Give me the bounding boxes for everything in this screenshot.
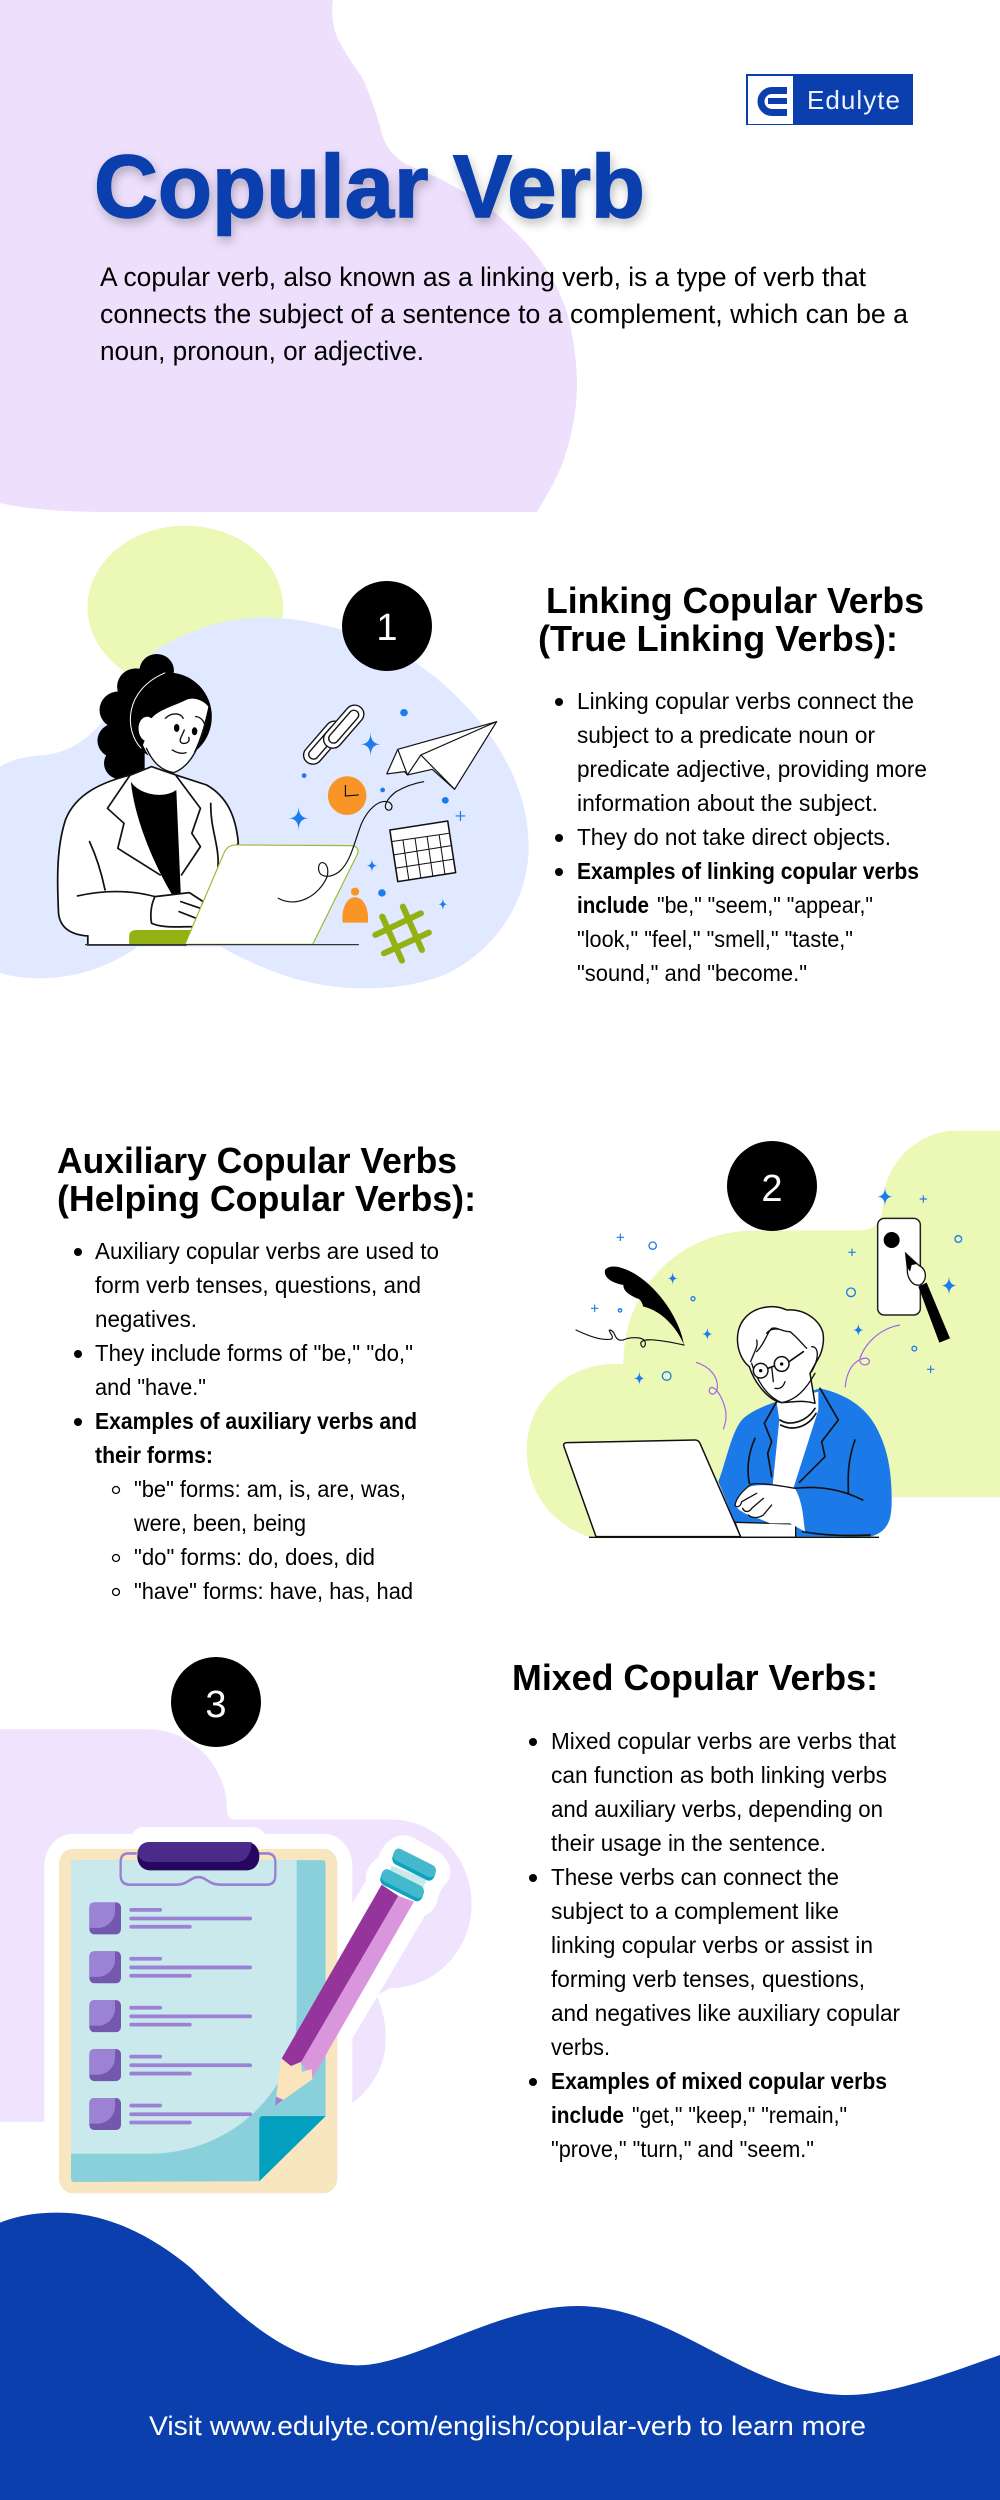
icon: feather and ink line [576, 1266, 684, 1347]
intro text [100, 262, 909, 366]
laptop base [735, 1522, 796, 1537]
head [737, 1307, 823, 1403]
lime blob [527, 1131, 1000, 1538]
paper [71, 1860, 326, 2182]
list: mixed copular verbs: their usage in the sentence. [551, 1830, 826, 1856]
list: linking copular verbs: They do not take direct objects. [577, 824, 891, 850]
number badge 3 [171, 1657, 261, 1747]
list: auxiliary copular verbs: "have" forms: have, has, had [134, 1578, 413, 1604]
list: auxiliary copular verbs: Auxiliary copular verbs are used to [95, 1238, 439, 1264]
list: auxiliary copular verbs: "be" forms: am, is, are, was, [134, 1476, 406, 1502]
body [58, 767, 238, 945]
heading: linking copular verbs: Linking Copular Verbs [546, 580, 924, 621]
list: mixed copular verbs: subject to a complement like [551, 1898, 839, 1924]
list: linking copular verbs [555, 688, 927, 986]
list: mixed copular verbs: "get," "keep," "remain," [632, 2102, 847, 2128]
list: mixed copular verbs: forming verb tenses, questions, [551, 1966, 865, 1992]
list: auxiliary copular verbs: They include forms of "be," "do," [95, 1340, 413, 1366]
list: linking copular verbs: "be," "seem," "appear," [657, 892, 873, 918]
list: auxiliary copular verbs: "do" forms: do, does, did [134, 1544, 375, 1570]
clipboard board [59, 1849, 337, 2193]
illustration 1: woman at laptop [0, 526, 529, 988]
hair [97, 654, 212, 779]
list: mixed copular verbs [529, 1728, 900, 2162]
heading: auxiliary copular verbs: (Helping Copular Verbs): [57, 1178, 476, 1219]
list: auxiliary copular verbs: negatives. [95, 1306, 197, 1332]
icon: paper plane [387, 722, 497, 789]
illustration 3: clipboard and pencil [0, 1729, 472, 2210]
list: mixed copular verbs: can function as both linking verbs [551, 1762, 887, 1788]
hand [735, 1485, 805, 1532]
list: mixed copular verbs: Examples of mixed copular verbs [551, 2068, 887, 2094]
heading: linking copular verbs: (True Linking Verbs): [538, 618, 898, 659]
list: mixed copular verbs: include [551, 2102, 624, 2128]
list: linking copular verbs: Examples of linking copular verbs [577, 858, 919, 884]
heading: auxiliary copular verbs: Auxiliary Copular Verbs [57, 1140, 457, 1181]
icon: hash [375, 907, 429, 961]
number badge 3: 3 [205, 1684, 227, 1726]
title: Copular Verb [94, 136, 645, 236]
desk line [589, 1535, 879, 1539]
laptop [185, 845, 358, 944]
hair and glasses [751, 1328, 817, 1403]
list: linking copular verbs: "look," "feel," "smell," "taste," [577, 926, 853, 952]
list: auxiliary copular verbs: Examples of auxiliary verbs and [95, 1408, 417, 1434]
heading: auxiliary copular verbs [57, 1140, 476, 1219]
number badge 1: 1 [376, 607, 398, 649]
list: auxiliary copular verbs: and "have." [95, 1374, 206, 1400]
list: linking copular verbs: Linking copular verbs connect the [577, 688, 914, 714]
footer wave [0, 2213, 1000, 2500]
list: linking copular verbs: include [577, 892, 649, 918]
jacket [718, 1388, 892, 1537]
list: mixed copular verbs: Mixed copular verbs are verbs that [551, 1728, 897, 1754]
footer text: Visit www.edulyte.com/english/copular-verb to learn more [149, 2411, 866, 2441]
lime blob [87, 526, 283, 689]
sparkles and rings [591, 1187, 962, 1386]
logo: Edulyte: Edulyte [807, 85, 900, 115]
list: auxiliary copular verbs [74, 1238, 439, 1604]
desk line [85, 943, 359, 947]
icon: chain link [300, 701, 368, 768]
purple blob [0, 1729, 472, 2122]
list: linking copular verbs: "sound," and "become." [577, 960, 807, 986]
number badge 1 [342, 581, 432, 671]
number badge 2: 2 [761, 1168, 783, 1210]
pencil [275, 1847, 438, 2106]
heading: linking copular verbs [538, 580, 924, 659]
heading: mixed copular verbs: Mixed Copular Verbs: [512, 1657, 878, 1698]
jacket lines [748, 1388, 870, 1536]
list: auxiliary copular verbs: their forms: [95, 1442, 213, 1468]
list: linking copular verbs: information about the subject. [577, 790, 878, 816]
icon: clock [328, 776, 366, 815]
intro text: A copular verb, also known as a linking verb, is a type of verb that [100, 262, 866, 292]
list: mixed copular verbs: and negatives like auxiliary copular [551, 2000, 900, 2026]
purple swirls [696, 1325, 900, 1429]
intro text: noun, pronoun, or adjective. [100, 336, 424, 366]
green wrist bar [129, 930, 191, 944]
jacket lines [77, 775, 218, 897]
list: mixed copular verbs: "prove," "turn," and "seem." [551, 2136, 814, 2162]
shirt [773, 1392, 818, 1488]
swirl [278, 782, 424, 902]
illustration 2: man at laptop [527, 1131, 1000, 1538]
header background blob [0, 0, 577, 512]
checklist items [89, 1902, 252, 2130]
clip outline [121, 1853, 275, 1885]
list: linking copular verbs: subject to a predicate noun or [577, 722, 875, 748]
icon: person [342, 888, 368, 923]
list: auxiliary copular verbs: were, been, being [133, 1510, 306, 1536]
sparkles and dots [288, 709, 449, 911]
list: auxiliary copular verbs: form verb tenses, questions, and [95, 1272, 421, 1298]
number badge 2 [727, 1141, 817, 1231]
list: mixed copular verbs: and auxiliary verbs, depending on [551, 1796, 883, 1822]
icon: calendar [390, 821, 456, 882]
hand [151, 893, 203, 927]
list: mixed copular verbs: verbs. [551, 2034, 610, 2060]
intro text: connects the subject of a sentence to a complement, which can be a [100, 299, 909, 329]
list: mixed copular verbs: linking copular verbs or assist in [551, 1932, 873, 1958]
clip bar [137, 1842, 259, 1870]
face [139, 699, 208, 773]
black shirt [131, 782, 181, 895]
paper fold [259, 2116, 326, 2181]
list: linking copular verbs: predicate adjective, providing more [577, 756, 927, 782]
list: mixed copular verbs: These verbs can connect the [551, 1864, 839, 1890]
laptop [564, 1440, 741, 1537]
white outline [44, 1827, 450, 2210]
icon: phone and brush [878, 1218, 950, 1343]
blue blob [0, 617, 529, 988]
logo: Edulyte [746, 74, 913, 125]
